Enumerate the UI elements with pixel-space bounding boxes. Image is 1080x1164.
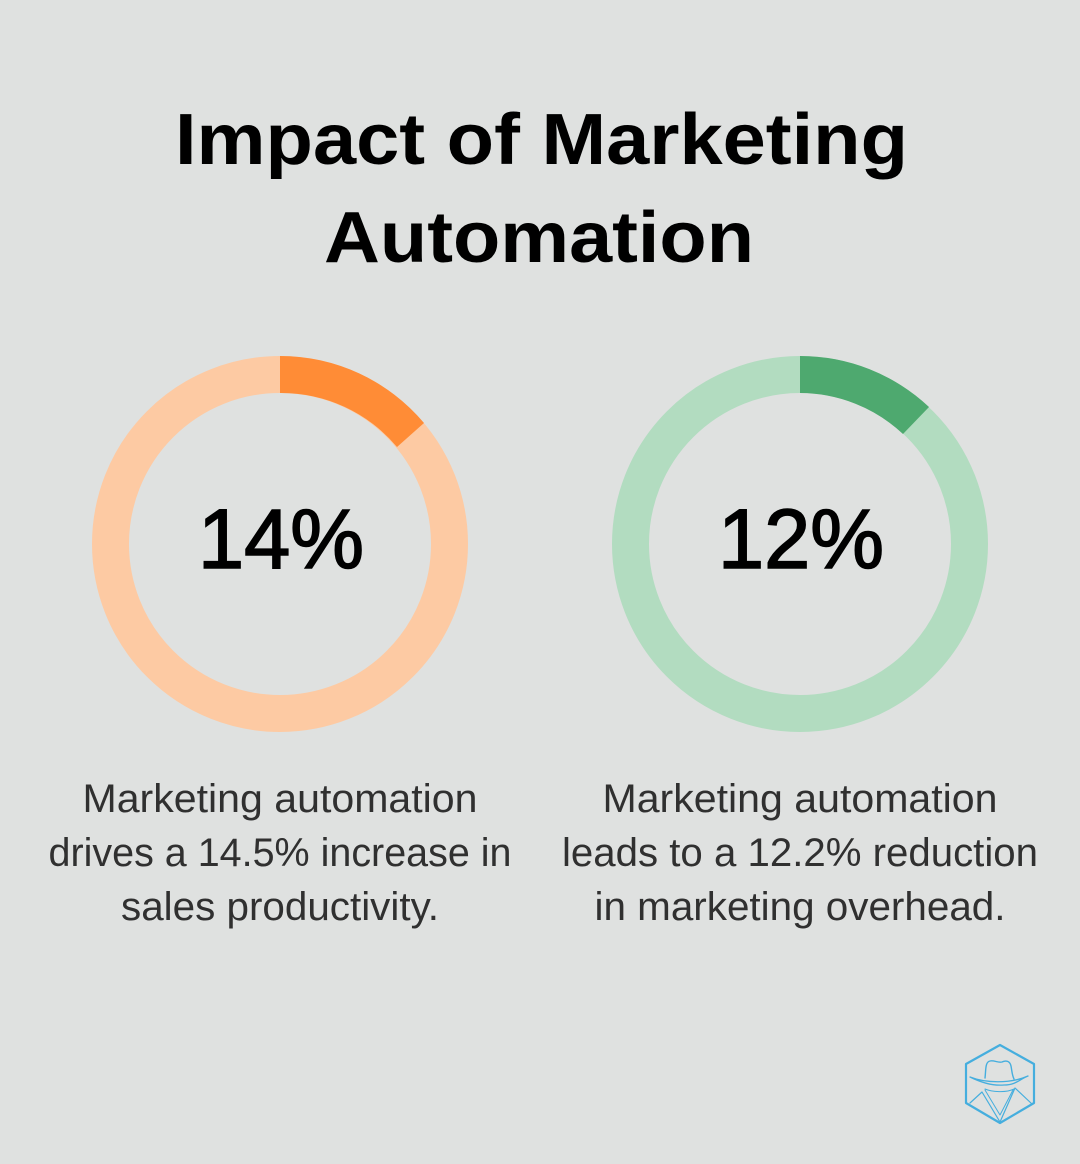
title: Impact of Marketing bbox=[175, 100, 908, 180]
title: Automation bbox=[324, 198, 754, 278]
description: marketing overhead: Marketing automation bbox=[602, 777, 998, 821]
value: 14%: 14% bbox=[198, 492, 364, 586]
description: marketing overhead: leads to a 12.2% reduction bbox=[562, 831, 1038, 875]
description: sales productivity: sales productivity. bbox=[121, 885, 439, 929]
icon: hexagon spy logo bbox=[966, 1045, 1034, 1123]
title bbox=[175, 100, 908, 278]
panel: marketing overhead bbox=[562, 356, 1038, 929]
value: 12%: 12% bbox=[718, 492, 884, 586]
panel: sales productivity bbox=[48, 356, 512, 929]
donut chart: 12% bbox=[630, 356, 970, 714]
description: sales productivity: drives a 14.5% increase in bbox=[48, 831, 512, 875]
description: sales productivity bbox=[48, 777, 512, 929]
description: marketing overhead bbox=[562, 777, 1038, 929]
description: marketing overhead: in marketing overhead. bbox=[594, 885, 1006, 929]
description: sales productivity: Marketing automation bbox=[82, 777, 478, 821]
donut chart: 14% bbox=[110, 356, 450, 714]
